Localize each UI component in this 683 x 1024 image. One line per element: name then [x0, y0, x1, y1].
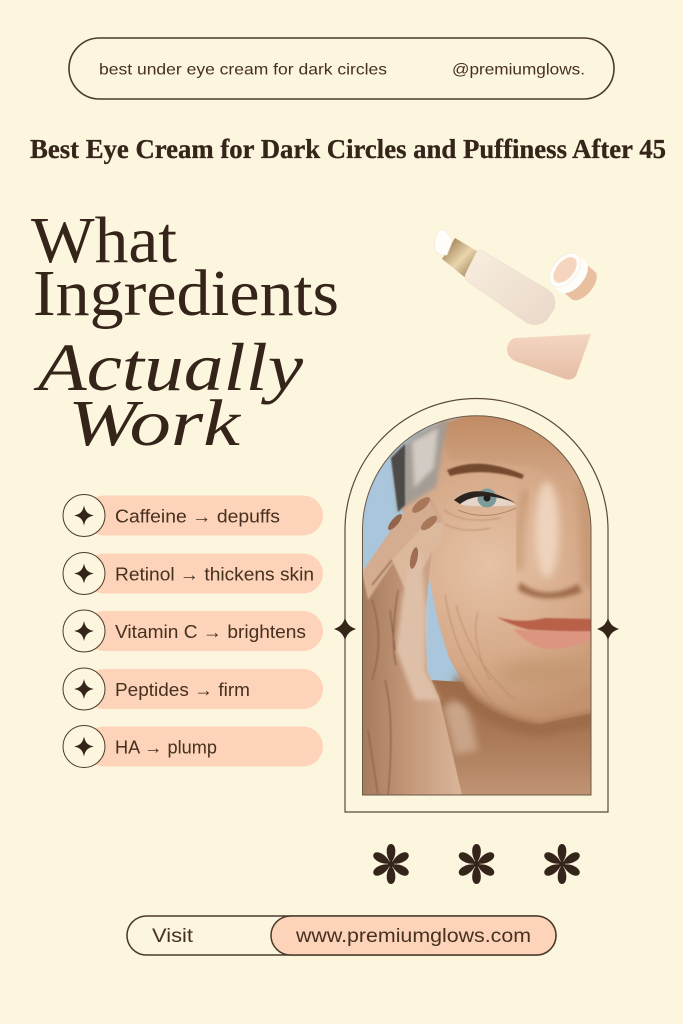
bottle — [435, 229, 555, 325]
main headline — [31, 204, 339, 460]
cheek wrinkles — [444, 510, 514, 700]
far-side face shading — [579, 484, 590, 588]
nails — [412, 497, 430, 513]
arch frame — [345, 399, 608, 812]
photo: woman touching under-eye — [360, 410, 600, 800]
knuckle lines — [368, 560, 398, 795]
tube — [507, 334, 591, 380]
ingredient list — [63, 494, 323, 768]
ingredient: ha: HA → plump — [115, 738, 217, 758]
ingredient: peptides: Peptides → firm — [115, 680, 250, 700]
ingredient: ha — [63, 726, 323, 768]
visit website button: Visit — [152, 926, 194, 947]
neck — [431, 680, 590, 794]
ingredient: retinol — [63, 552, 323, 594]
hand — [362, 494, 462, 795]
icon: arch left sparkle — [334, 618, 356, 640]
forehead tone — [434, 416, 545, 462]
main headline: Ingredients — [33, 257, 339, 330]
ingredient: caffeine — [63, 494, 323, 536]
hair — [392, 420, 448, 512]
article title: Best Eye Cream for Dark Circles and Puffiness After 45 — [30, 134, 666, 164]
ingredient: caffeine: Caffeine → depuffs — [115, 506, 280, 526]
icon: cosmetic products — [435, 229, 603, 380]
icon: three flowers — [372, 844, 581, 884]
eyebrow — [447, 464, 524, 479]
eye — [454, 488, 516, 516]
lips — [497, 617, 592, 649]
top pill banner — [69, 38, 614, 99]
main headline: Actually — [33, 329, 304, 405]
nose — [535, 482, 559, 578]
main headline: Work — [68, 387, 242, 460]
ingredient: vitamin c — [63, 610, 323, 652]
fingers — [363, 503, 432, 600]
main headline: What — [31, 204, 177, 277]
ingredient: peptides — [63, 668, 323, 710]
top pill banner: best under eye cream for dark circles — [99, 62, 387, 78]
ingredient: vitamin c: Vitamin C → brightens — [115, 622, 306, 642]
icon: arch right sparkle — [597, 618, 619, 640]
visit website button — [127, 916, 556, 955]
visit website button: www.premiumglows.com — [295, 926, 531, 947]
face — [396, 414, 600, 724]
top pill banner: @premiumglows. — [452, 62, 585, 78]
photo outline — [362, 416, 591, 795]
mouth area and chin shading — [504, 660, 564, 680]
jar — [543, 247, 603, 307]
ingredient: retinol: Retinol → thickens skin — [115, 564, 314, 584]
